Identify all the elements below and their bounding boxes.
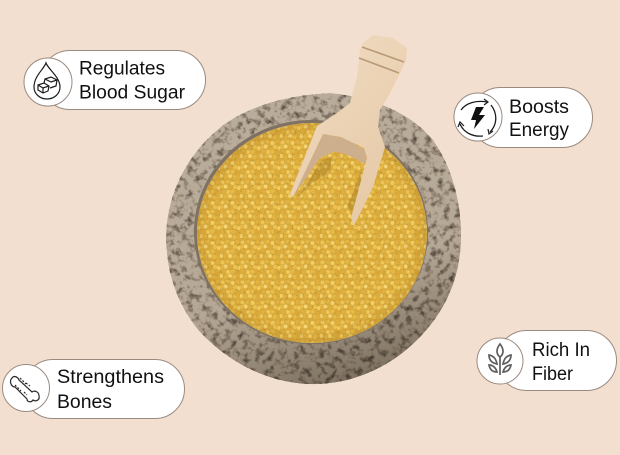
pill — [496, 330, 616, 390]
scoop shadow on grains — [298, 156, 362, 224]
scoop body and handle — [290, 35, 407, 226]
label: Rich In — [532, 340, 590, 361]
badge: regulates blood sugar: Blood Sugar — [79, 82, 186, 104]
icon circle — [2, 364, 50, 412]
wooden scoop — [290, 35, 407, 226]
scoop handle grooves — [359, 47, 404, 73]
icon circle — [24, 58, 72, 106]
label: Regulates — [79, 58, 165, 80]
icon: plant sprig — [489, 344, 511, 375]
scoop hollow — [293, 134, 367, 197]
label: Strengthens — [57, 367, 164, 388]
icon circle — [454, 93, 502, 141]
grain edge shading — [197, 123, 427, 343]
pill — [24, 360, 184, 418]
pill — [470, 88, 592, 148]
badge: boosts energy: Energy — [509, 120, 569, 141]
stone bowl — [166, 93, 461, 384]
badge: rich in fiber: Fiber — [532, 364, 574, 385]
icon: blood drop with sugar cubes — [34, 63, 60, 99]
badge: boosts energy — [454, 88, 592, 148]
icon: bone — [11, 377, 39, 402]
badge: rich in fiber — [477, 330, 616, 390]
label: Boosts — [509, 97, 569, 118]
pill — [40, 50, 206, 110]
badge: strengthens bones — [2, 360, 184, 418]
millet grains — [197, 123, 427, 343]
icon circle — [477, 338, 523, 384]
badge: regulates blood sugar — [24, 50, 206, 110]
bowl inner wall — [194, 120, 428, 344]
icon: lightning bolt with arrows — [458, 99, 496, 136]
badge: strengthens bones: Bones — [57, 392, 112, 413]
stone bowl with millet and wooden scoop — [166, 35, 461, 384]
